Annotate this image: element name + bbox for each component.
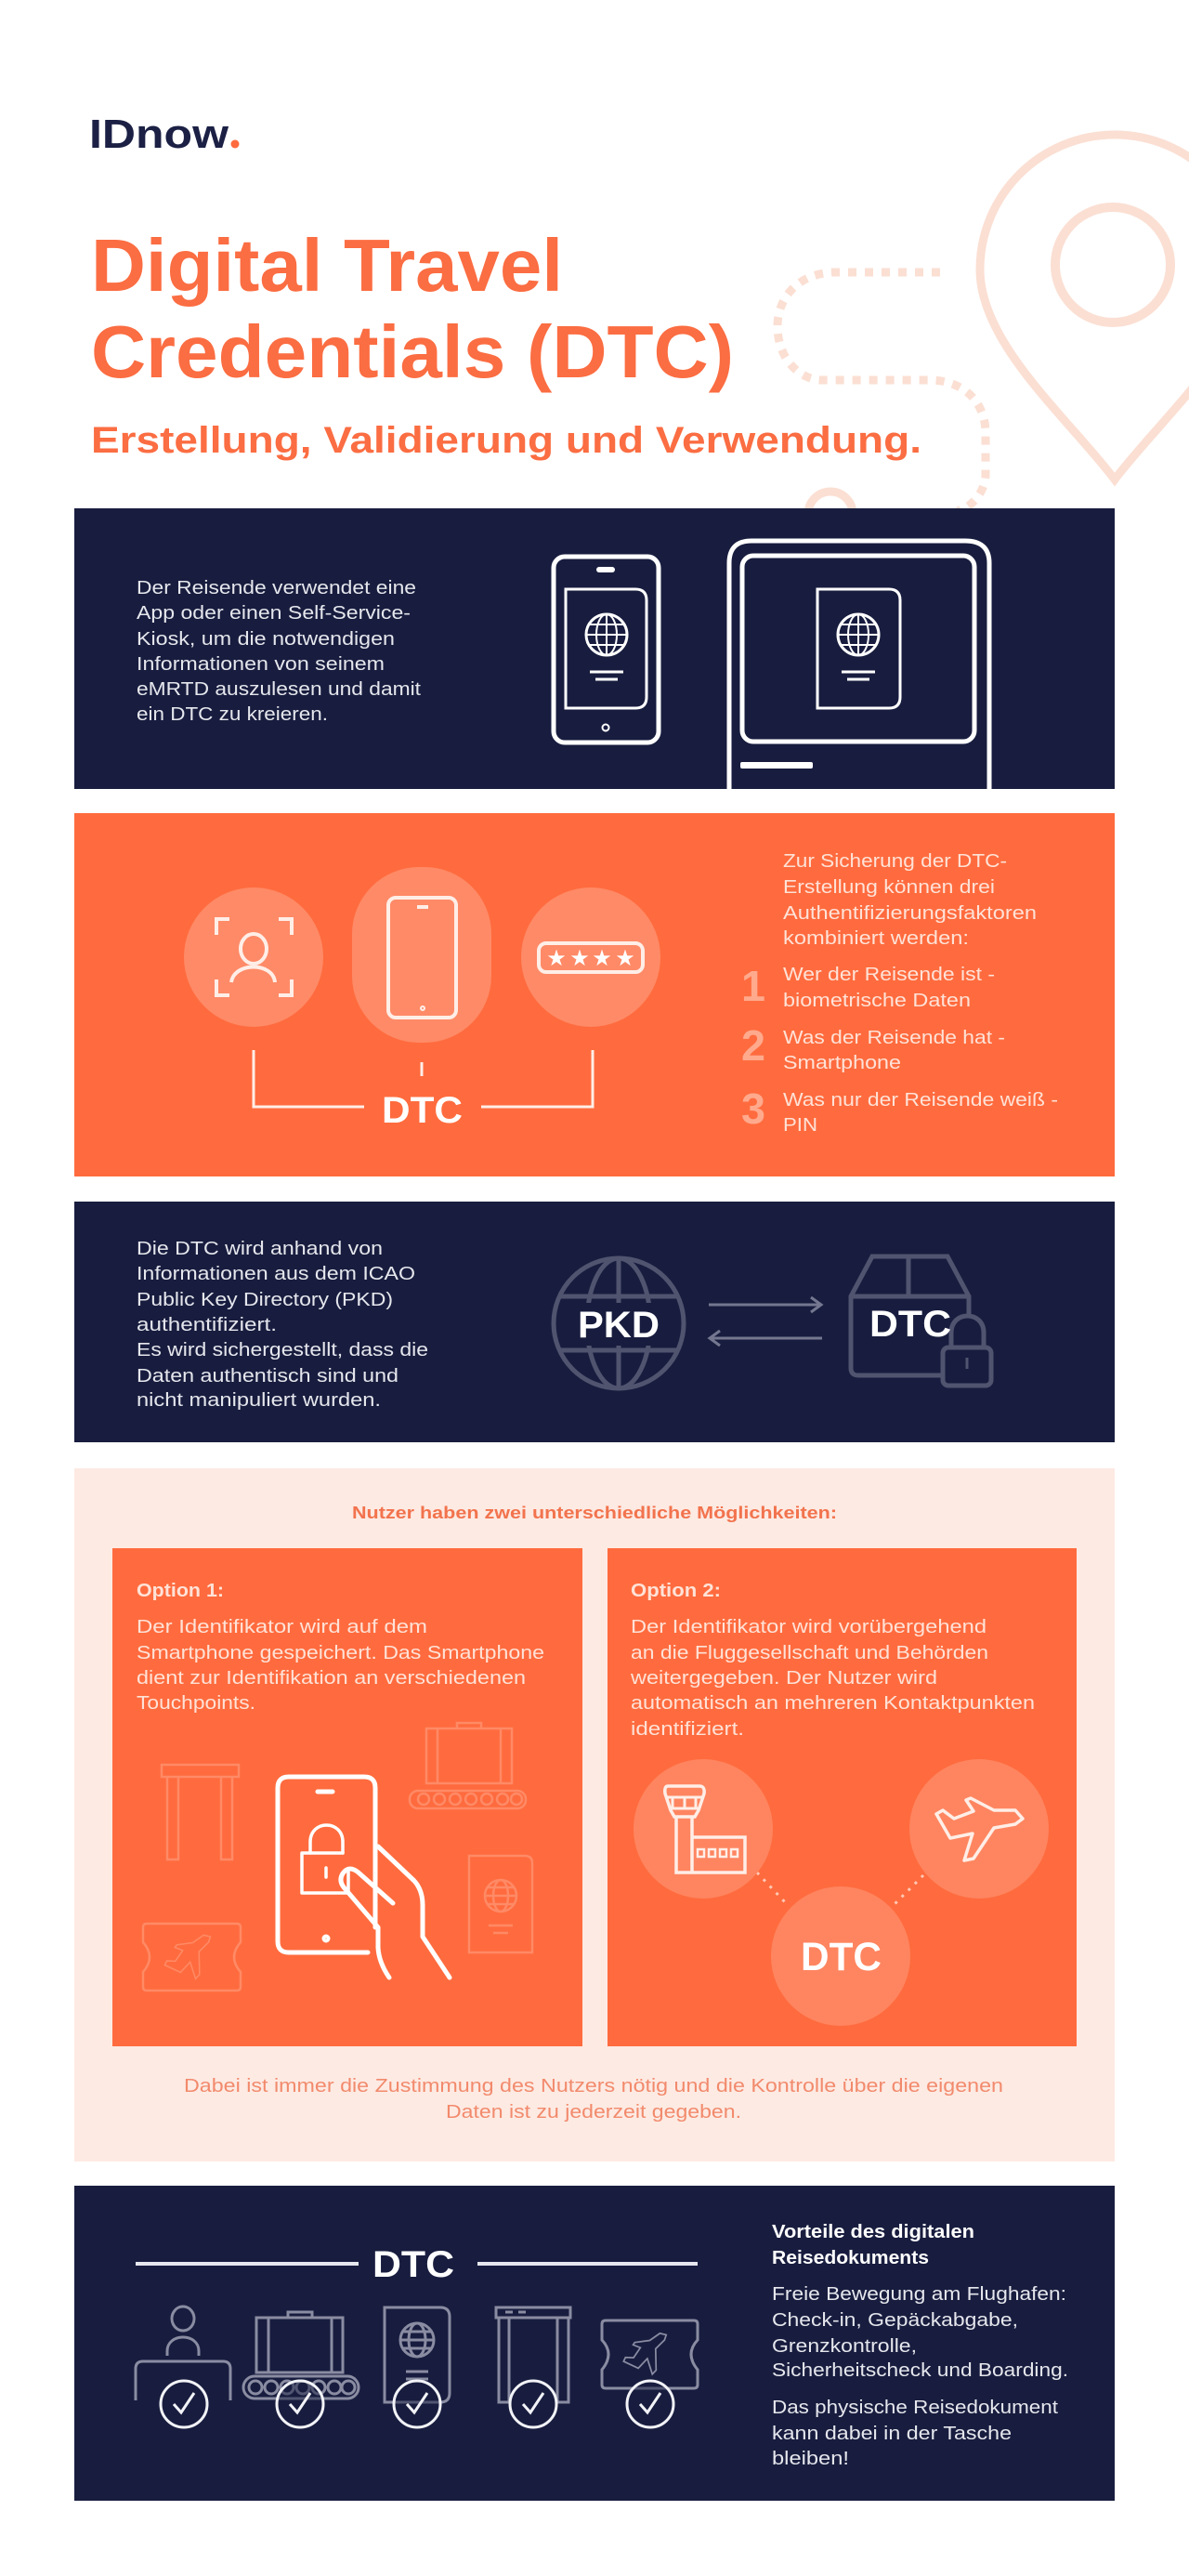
text block: traveller reads eMRTD: ein DTC zu kreieren. (137, 704, 328, 725)
text block: ICAO PKD: authentifiziert. (137, 1315, 277, 1335)
icon: self-service kiosk with passport (729, 541, 989, 789)
icon: baggage conveyor (243, 2312, 359, 2399)
icon: phone with passport (554, 557, 659, 743)
text block: benefits: Check-in, Gepäckabgabe, (772, 2310, 1018, 2331)
heading: two options: Nutzer haben zwei unterschiedliche Möglichkeiten: (352, 1504, 837, 1522)
panel: two options (74, 1468, 1115, 2162)
icon: smartphone (352, 867, 491, 1043)
option 2 text: an die Fluggesellschaft und Behörden (631, 1643, 988, 1663)
icon: check-in desk (136, 2307, 230, 2400)
factor 3: 3 (741, 1084, 765, 1133)
text block: factors intro: Zur Sicherung der DTC- (783, 851, 1007, 872)
text block: ICAO PKD (137, 1239, 428, 1411)
icon: hand holding phone with lock (278, 1777, 450, 1978)
text block: traveller reads eMRTD (137, 578, 422, 725)
consent note (184, 2076, 1003, 2123)
text block: benefits: bleiben! (772, 2449, 849, 2469)
title: Digital Travel (91, 224, 563, 307)
text block: ICAO PKD: Die DTC wird anhand von (137, 1239, 383, 1259)
dotted connectors (757, 1873, 923, 1905)
text block: traveller reads eMRTD: Der Reisende verwendet eine (137, 578, 416, 598)
option 2 text: identifiziert. (631, 1719, 744, 1740)
icon: PIN field: ★ (546, 946, 567, 971)
factor 2: 2 (741, 1021, 765, 1070)
faint icon: security gate (162, 1765, 239, 1860)
DTC circle (771, 1886, 910, 2026)
icon: PKD globe (554, 1258, 684, 1388)
text block: traveller reads eMRTD: Informationen von seinem (137, 654, 385, 675)
icon: security gate (496, 2307, 570, 2402)
faint icon: suitcase on conveyor (410, 1723, 526, 1808)
card: option 1 (112, 1548, 582, 2046)
bracket with DTC label: DTC (382, 1090, 463, 1131)
text block: ICAO PKD: Informationen aus dem ICAO (137, 1264, 415, 1284)
factor 2: Was der Reisende hat - (783, 1028, 1005, 1048)
logo: IDnow: IDnow (89, 112, 229, 157)
consent note: Dabei ist immer die Zustimmung des Nutzers nötig und die Kontrolle über die eigenen (184, 2076, 1003, 2096)
factor 3: PIN (783, 1115, 817, 1136)
icon: airport tower (634, 1759, 773, 1899)
option 1 text (137, 1581, 544, 1714)
text block: benefits (772, 2222, 1068, 2469)
text block: traveller reads eMRTD: eMRTD auszulesen und damit (137, 679, 422, 700)
title: Credentials (DTC) (91, 310, 734, 393)
option 2 text: Option 2: (631, 1581, 721, 1601)
title (91, 224, 734, 393)
panel: creating the DTC (74, 508, 1115, 789)
icon: face biometrics (184, 887, 323, 1027)
factor 3: Was nur der Reisende weiß - (783, 1090, 1058, 1111)
factor 1: biometrische Daten (783, 991, 971, 1011)
panel: authentication factors (74, 813, 1115, 1176)
icon: locked DTC box: DTC (869, 1304, 951, 1345)
DTC circle: DTC (801, 1935, 882, 1979)
text block: ICAO PKD: Public Key Directory (PKD) (137, 1290, 393, 1310)
icon: PIN field: ★ (569, 946, 590, 971)
icon: locked DTC box (851, 1256, 991, 1386)
text block: factors intro: kombiniert werden: (783, 928, 969, 949)
icon: passport (385, 2307, 450, 2402)
icon: PIN field: ★ (592, 946, 612, 971)
text block: benefits: Das physische Reisedokument (772, 2398, 1058, 2418)
text block: ICAO PKD: nicht manipuliert wurden. (137, 1390, 381, 1411)
arrow: PKD to DTC (709, 1297, 821, 1312)
DTC heading with rules: DTC (372, 2244, 454, 2285)
list: three factors (741, 962, 1058, 1136)
option 1 text: Touchpoints. (137, 1693, 255, 1714)
text block: factors intro: Authentifizierungsfaktoren (783, 903, 1037, 924)
factor 1 (741, 962, 995, 1011)
text block: benefits: kann dabei in der Tasche (772, 2424, 1012, 2444)
faint icon: boarding ticket (143, 1924, 241, 1991)
factor 1: Wer der Reisende ist - (783, 965, 995, 985)
bracket with DTC label (254, 1050, 593, 1131)
text block: benefits: Reisedokuments (772, 2248, 929, 2268)
factor 3 (741, 1084, 1058, 1136)
icon: PKD globe: PKD (578, 1305, 660, 1346)
text block: benefits: Freie Bewegung am Flughafen: (772, 2284, 1066, 2305)
icon: PIN field: ★ (615, 946, 635, 971)
option 1 text: Option 1: (137, 1581, 224, 1601)
consent note: Daten ist zu jederzeit gegeben. (446, 2102, 741, 2123)
faint icon: passport (469, 1856, 532, 1952)
option 2 text: automatisch an mehreren Kontaktpunkten (631, 1693, 1035, 1714)
text block: factors intro (783, 851, 1037, 949)
option 1 text: Smartphone gespeichert. Das Smartphone (137, 1643, 544, 1663)
arrow: DTC to PKD (710, 1331, 822, 1346)
check marks (161, 2381, 673, 2427)
subtitle: Erstellung, Validierung und Verwendung. (91, 420, 921, 461)
option 2 text: Der Identifikator wird vorübergehend (631, 1617, 986, 1637)
icon: boarding ticket (602, 2320, 698, 2388)
text block: ICAO PKD: Daten authentisch sind und (137, 1366, 399, 1387)
option 2 text: weitergegeben. Der Nutzer wird (630, 1668, 937, 1689)
decorative location pin with dotted route (777, 135, 1189, 536)
option 1 text: Der Identifikator wird auf dem (137, 1617, 427, 1637)
factor 2: Smartphone (783, 1053, 901, 1073)
card: option 2 (608, 1548, 1077, 2046)
panel: PKD authentication (74, 1202, 1115, 1442)
text block: traveller reads eMRTD: Kiosk, um die notwendigen (137, 629, 395, 650)
text block: benefits: Sicherheitscheck und Boarding. (772, 2360, 1068, 2381)
text block: benefits: Grenzkontrolle, (772, 2336, 917, 2357)
panel: benefits (74, 2186, 1115, 2501)
option 2 text (630, 1581, 1035, 1740)
text block: benefits: Vorteile des digitalen (772, 2222, 974, 2242)
text block: traveller reads eMRTD: App oder einen Self-Service- (137, 603, 411, 624)
text block: factors intro: Erstellung können drei (783, 877, 995, 898)
icon: PIN field (521, 887, 660, 1027)
factor 2 (741, 1021, 1005, 1073)
text block: ICAO PKD: Es wird sichergestellt, dass die (137, 1340, 428, 1360)
icon: airplane (909, 1759, 1049, 1899)
option 1 text: dient zur Identifikation an verschiedenen (137, 1668, 526, 1689)
factor 1: 1 (741, 962, 765, 1010)
